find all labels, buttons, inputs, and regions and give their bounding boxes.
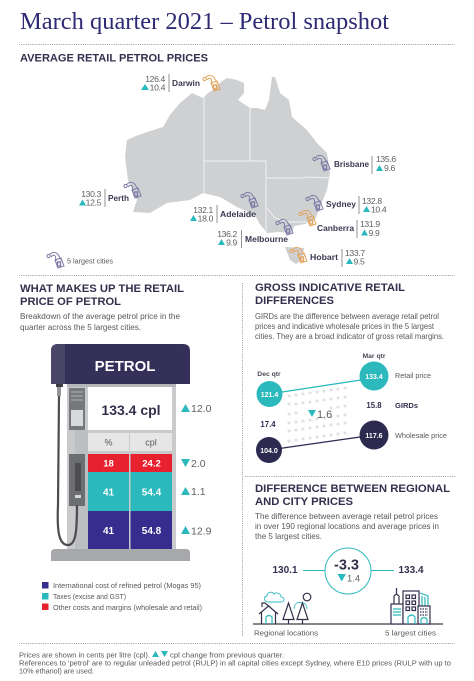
navy row: international cost: 54.8 [142, 526, 162, 537]
Hobart price: 133.7 [345, 248, 365, 258]
Perth price: Perth [108, 194, 129, 203]
label: 5 largest cities: 5 largest cities [385, 628, 436, 638]
regional vs city comparison: 1.4 [347, 574, 360, 584]
heading: gross indicative retail differences: GROSS INDICATIVE RETAIL [255, 282, 405, 294]
footnote: Prices are shown in cents per litre (cpl). [19, 652, 150, 660]
Darwin price: 126.4 [145, 74, 166, 84]
map legend: 5 largest cities: 5 largest cities [67, 256, 113, 266]
GIRDs slope chart: Wholesale price [395, 431, 447, 440]
text: GIRDs description: cities. They are a broad indicator of gross retail margins. [255, 332, 444, 341]
GIRDs slope chart [256, 353, 447, 463]
regional vs city comparison: -3.3 [334, 558, 359, 574]
Canberra price: 9.9 [368, 228, 380, 238]
text: breakdown description [20, 312, 181, 332]
footnote: 10% ethanol) are used. [19, 668, 94, 676]
total price [88, 387, 172, 430]
GIRDs slope chart: 121.4 [261, 392, 278, 399]
total price: 133.4 cpl [101, 402, 161, 418]
Adelaide price [190, 192, 258, 224]
pump base [51, 549, 190, 561]
table header: % [104, 438, 113, 448]
footnote: References to 'petrol' are to regular unleaded petrol (RULP) in all capital cities except Sydney, where E10 prices (RULP with up to [19, 660, 451, 668]
heading: difference between regional and city prices [255, 483, 450, 508]
table header: cpl [145, 438, 157, 448]
text: regional difference description: in over 190 regional locations and average prices in [255, 522, 439, 531]
text: breakdown description: Breakdown of the average petrol price in the [20, 312, 181, 321]
text: regional difference description: The difference between average retail petrol prices [255, 512, 438, 521]
red row: other costs: 24.2 [142, 458, 161, 470]
GIRDs slope chart: 133.4 [365, 374, 383, 381]
Adelaide price: 18.0 [198, 214, 214, 224]
heading: difference between regional and city prices: DIFFERENCE BETWEEN REGIONAL [255, 483, 450, 495]
heading: average retail petrol prices: AVERAGE RETAIL PETROL PRICES [20, 52, 208, 64]
teal row: taxes: 41 [103, 488, 114, 498]
change labels: 1.1 [191, 486, 206, 498]
footnote: cpl change from previous quarter. [170, 652, 284, 660]
GIRDs slope chart: Mar qtr [362, 353, 386, 360]
GIRDs slope chart: Retail price [395, 371, 431, 380]
Darwin price: 10.4 [150, 82, 166, 92]
Canberra price: Canberra [317, 224, 355, 233]
heading: what makes up the retail price: WHAT MAKES UP THE RETAIL [20, 283, 184, 295]
teal row: taxes: 54.4 [142, 488, 162, 498]
pump legend [42, 581, 202, 612]
Brisbane price: 135.6 [376, 154, 396, 164]
Hobart price [290, 247, 365, 267]
label: regional locations: Regional locations [254, 628, 318, 638]
navy row: international cost: 41 [103, 526, 114, 537]
Sydney price: Sydney [326, 200, 357, 209]
Sydney price: 10.4 [371, 204, 387, 214]
regional vs city comparison: 133.4 [398, 565, 424, 576]
Brisbane price: Brisbane [334, 160, 370, 169]
regional vs city comparison [272, 548, 424, 594]
icon: regional town [259, 592, 311, 624]
Hobart price: Hobart [310, 253, 338, 262]
ground line [253, 623, 443, 625]
heading: what makes up the retail price [20, 283, 184, 308]
Brisbane price: 9.6 [384, 163, 395, 173]
change labels: 12.9 [191, 526, 212, 538]
change labels [181, 403, 212, 538]
Brisbane price [313, 154, 396, 174]
Canberra price: 131.9 [360, 219, 380, 229]
GIRDs slope chart: 17.4 [260, 420, 276, 429]
Perth price: 12.5 [86, 198, 102, 208]
Perth price [79, 182, 141, 208]
text: GIRDs description: prices and indicative wholesale prices in the 5 largest [255, 322, 435, 331]
Sydney price: 132.8 [362, 196, 382, 206]
Hobart price: 9.5 [354, 256, 365, 266]
GIRDs slope chart: 117.6 [365, 433, 383, 440]
table header [88, 433, 172, 451]
text: breakdown description: quarter across the 5 largest cities. [20, 323, 141, 332]
map of Australia [125, 77, 330, 264]
heading: what makes up the retail price: PRICE OF PETROL [20, 296, 121, 308]
Adelaide price: Adelaide [220, 210, 257, 219]
navy row: international cost [88, 511, 172, 549]
Perth price: 130.3 [81, 189, 102, 199]
pump legend: International cost of refined petrol (Mogas 95) [53, 581, 201, 590]
GIRDs slope chart: Dec qtr [257, 371, 281, 378]
Melbourne price: 9.9 [226, 238, 238, 248]
pump header [51, 344, 190, 384]
Adelaide price: 132.1 [193, 205, 214, 215]
GIRDs slope chart: GIRDs [395, 401, 418, 410]
Melbourne price: 136.2 [217, 229, 238, 239]
GIRDs slope chart: 104.0 [260, 448, 278, 455]
text: GIRDs description [255, 312, 444, 341]
pump legend: Other costs and margins (wholesale and retail) [53, 603, 202, 612]
text: GIRDs description: GIRDs are the difference between average retail petrol [255, 312, 439, 321]
pump legend: Taxes (excise and GST) [53, 592, 126, 601]
Darwin price: Darwin [172, 79, 200, 88]
pump header: PETROL [95, 358, 155, 375]
GIRDs slope chart: 15.8 [366, 401, 382, 410]
Melbourne price [217, 219, 293, 248]
icon: city buildings [391, 588, 430, 624]
heading: gross indicative retail differences [255, 282, 405, 307]
Darwin price [141, 74, 220, 92]
change labels: 12.0 [191, 403, 212, 415]
Sydney price [306, 195, 387, 214]
change labels: 2.0 [191, 458, 206, 470]
Canberra price [299, 210, 380, 238]
Melbourne price: Melbourne [245, 235, 289, 244]
GIRDs slope chart: 1.6 [317, 409, 332, 421]
footnote [19, 651, 451, 676]
petrol pump chart [51, 344, 190, 561]
map legend: 5 largest cities [47, 252, 113, 268]
heading: gross indicative retail differences: DIFFERENCES [255, 295, 334, 307]
heading: difference between regional and city prices: AND CITY PRICES [255, 496, 353, 508]
red row: other costs: 18 [103, 458, 114, 470]
pump body [67, 384, 176, 549]
regional vs city comparison: 130.1 [272, 565, 298, 576]
text: regional difference description [255, 512, 439, 541]
teal row: taxes [88, 472, 172, 511]
hose [58, 395, 77, 545]
text: regional difference description: the 5 largest cities. [255, 532, 322, 541]
red row: other costs [88, 454, 172, 472]
title: March quarter 2021 – Petrol snapshot [20, 9, 389, 35]
